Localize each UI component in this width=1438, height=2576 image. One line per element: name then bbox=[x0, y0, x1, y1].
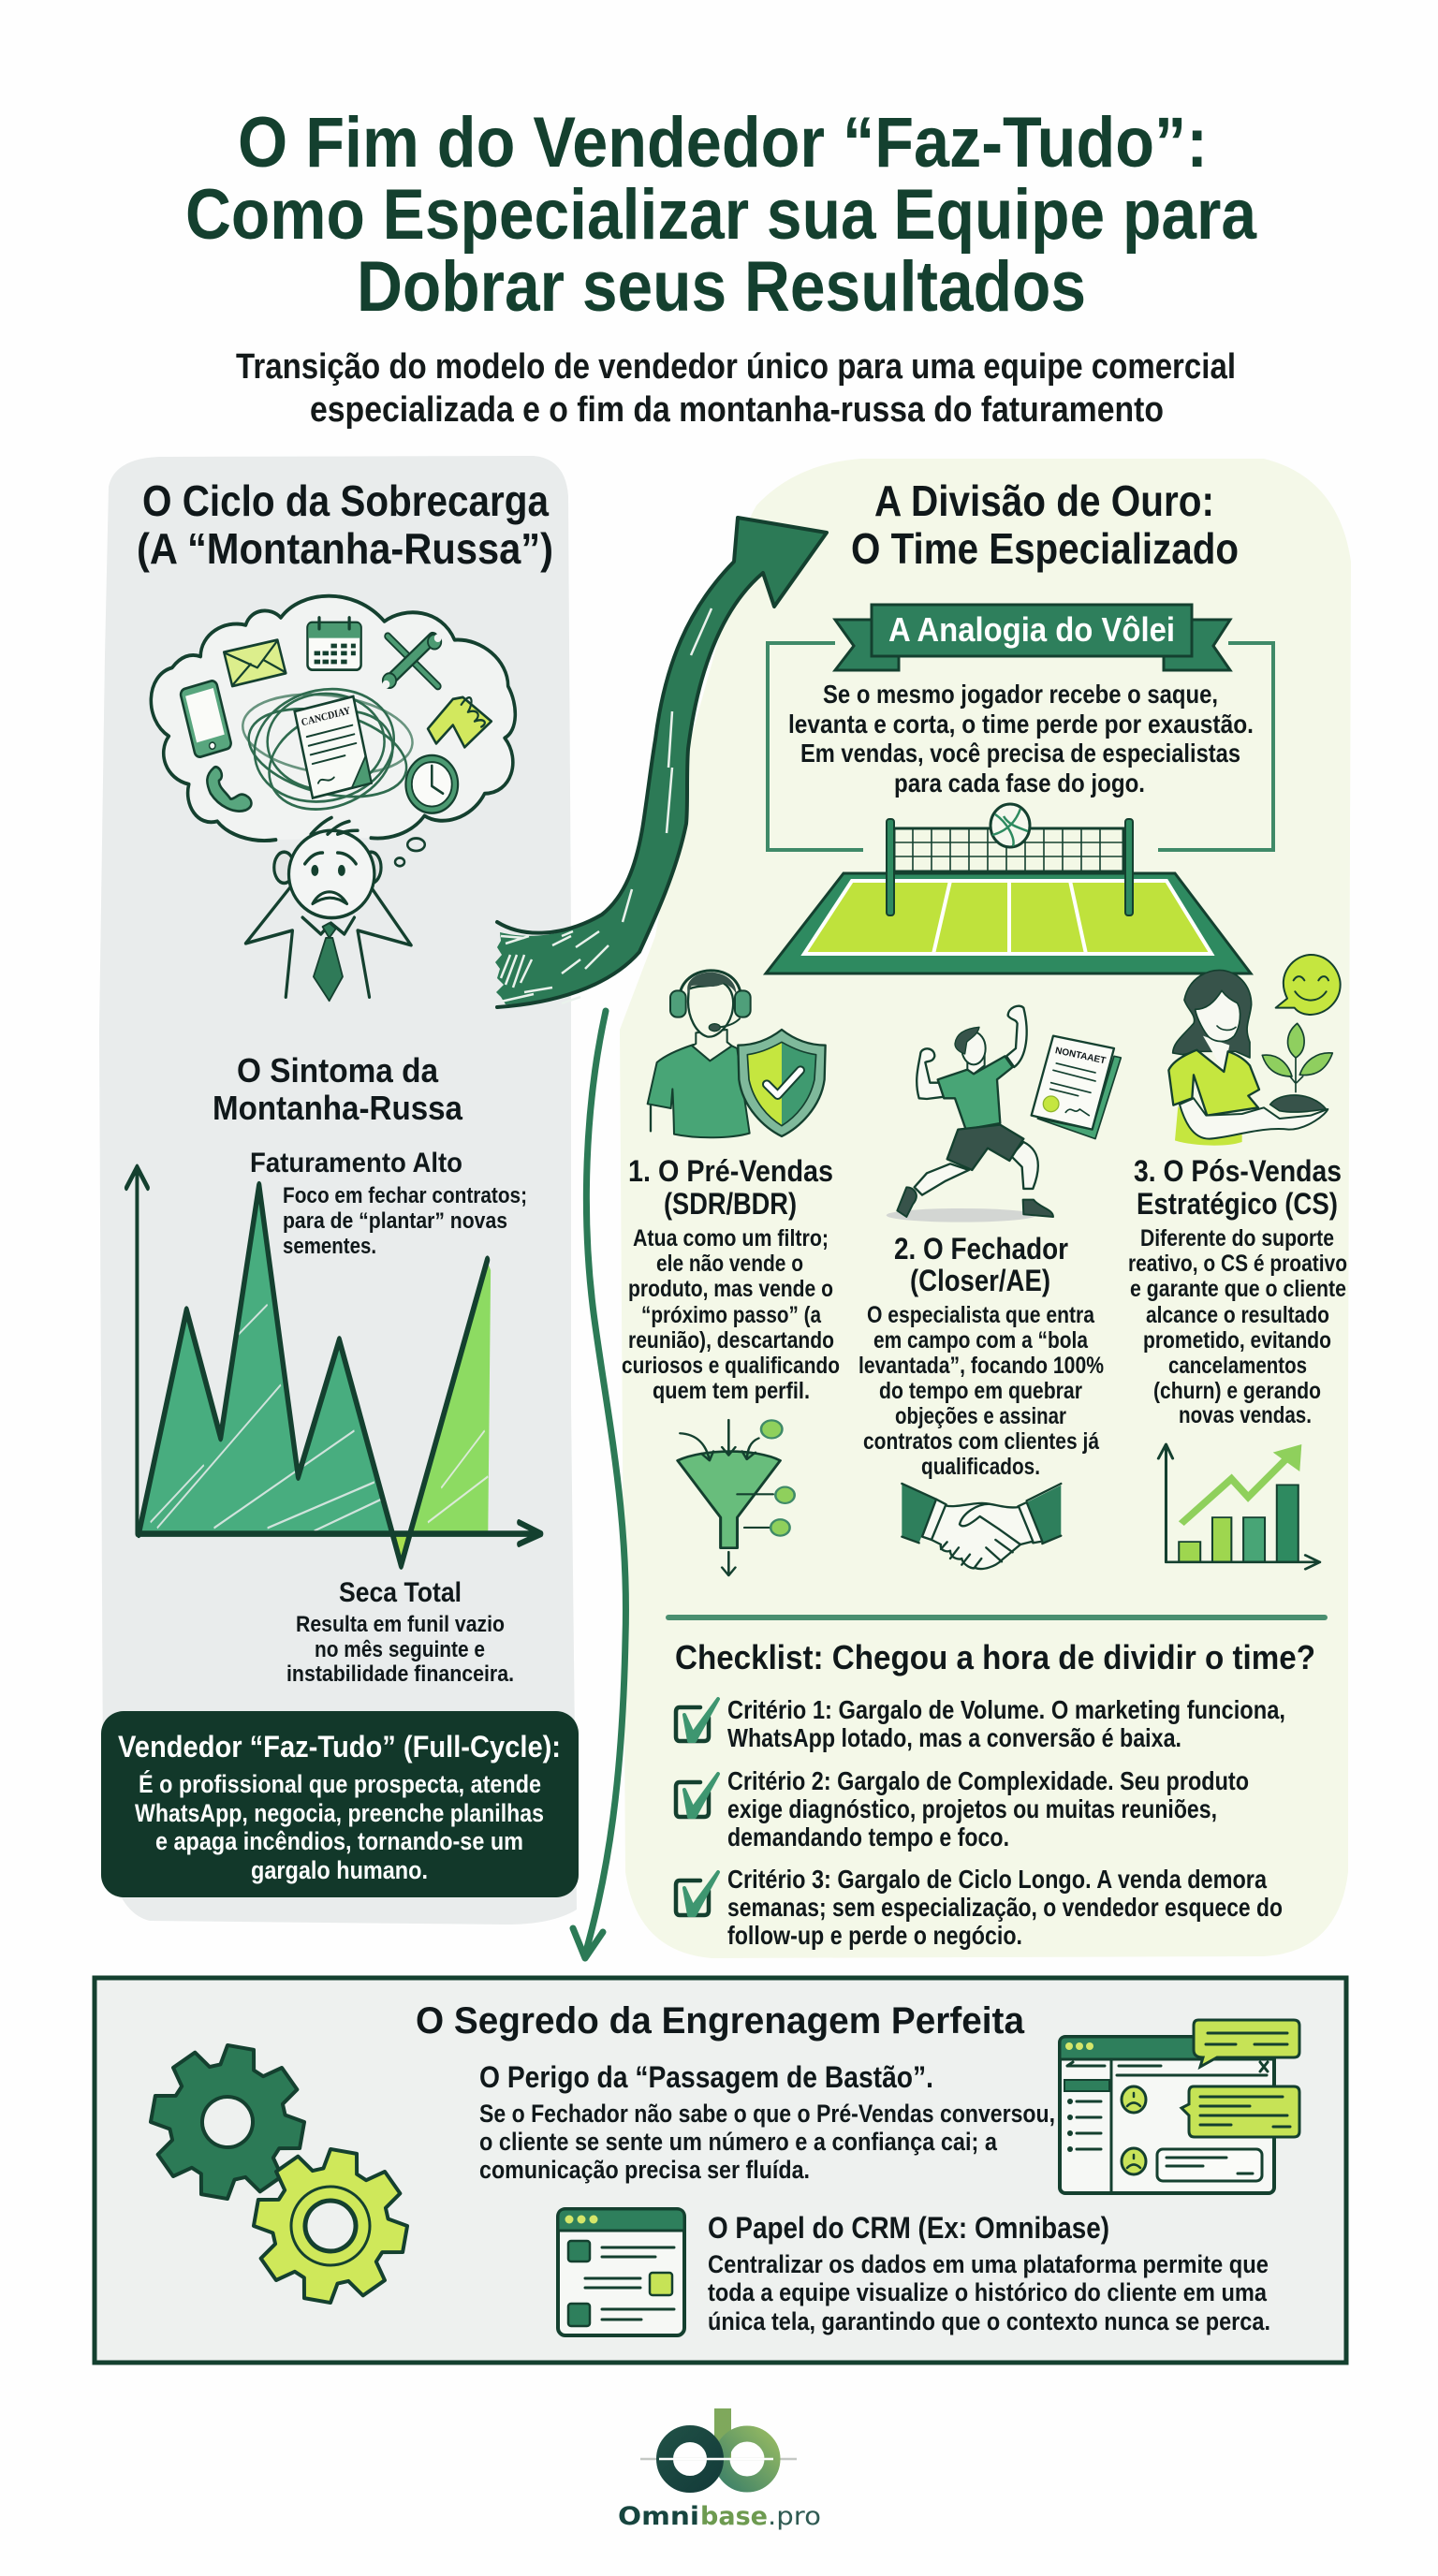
criterion 3: semanas; sem especialização, o vendedor esquece do bbox=[727, 1893, 1283, 1922]
icon: contract bbox=[295, 696, 372, 798]
role 2: fechador: contratos com clientes já bbox=[863, 1428, 1099, 1455]
criterion 2: Critério 2: Gargalo de Complexidade. Seu produto bbox=[727, 1766, 1249, 1795]
revenue line bbox=[139, 1185, 488, 1565]
label: seca total: no mês seguinte e bbox=[315, 1637, 485, 1662]
icon: contract: CANCDIAY bbox=[301, 706, 352, 728]
role 2: fechador bbox=[858, 1232, 1104, 1480]
role 2: fechador: 2. O Fechador bbox=[894, 1232, 1068, 1266]
heading: o sintoma da montanha-russa bbox=[213, 1051, 463, 1127]
stressed man bbox=[245, 817, 411, 1001]
heading: o sintoma da montanha-russa: Montanha-Russa bbox=[213, 1089, 463, 1127]
role 3: pós-vendas: Diferente do suporte bbox=[1140, 1225, 1334, 1251]
role 1: pré-vendas: “próximo passo” (a bbox=[641, 1302, 822, 1328]
eyes bbox=[311, 865, 345, 876]
role 3: pós-vendas: 3. O Pós-Vendas bbox=[1134, 1154, 1342, 1188]
text: o perigo da passagem de bastão: Se o Fechador não sabe o que o Pré-Vendas conversou, bbox=[479, 2100, 1055, 2128]
text: analogia: levanta e corta, o time perde por exaustão. bbox=[788, 710, 1254, 739]
role 1: pré-vendas: (SDR/BDR) bbox=[664, 1187, 797, 1221]
frame: analogia bbox=[768, 643, 1273, 850]
text: o perigo da passagem de bastão: comunicação precisa ser fluída. bbox=[479, 2156, 810, 2184]
text: analogia: Se o mesmo jogador recebe o saque, bbox=[823, 680, 1218, 709]
banner: a analogia do vôlei bbox=[835, 605, 1230, 670]
criterion 3: Critério 3: Gargalo de Ciclo Longo. A venda demora bbox=[727, 1865, 1267, 1894]
role 1: pré-vendas: ele não vende o bbox=[656, 1251, 803, 1277]
criterion 3 bbox=[676, 1865, 1283, 1950]
icon: sdr headset with shield bbox=[648, 971, 826, 1137]
role 2: fechador: objeções e assinar bbox=[895, 1403, 1066, 1429]
logo wordmark: Omni bbox=[618, 2502, 699, 2531]
icon: wrench and screwdriver bbox=[382, 634, 442, 688]
chat bubble middle bbox=[1181, 2086, 1299, 2137]
title: Dobrar seus Resultados bbox=[357, 247, 1086, 327]
role 3: pós-vendas: novas vendas. bbox=[1179, 1402, 1312, 1428]
icon: overwhelmed salesman with thought cloud bbox=[151, 596, 515, 1001]
light green area bbox=[409, 1262, 491, 1534]
criterion 2: exige diagnóstico, projetos ou muitas reuniões, bbox=[727, 1794, 1217, 1823]
role 3: pós-vendas: reativo, o CS é proativo bbox=[1128, 1251, 1347, 1277]
checklist bbox=[675, 1638, 1315, 1950]
icon: calendar bbox=[307, 618, 361, 670]
role 3: pós-vendas: cancelamentos bbox=[1168, 1353, 1307, 1379]
chat bubble bottom bbox=[1157, 2149, 1262, 2181]
heading: o ciclo da sobrecarga: (A “Montanha-Russa”) bbox=[137, 524, 553, 573]
callout: vendedor faz-tudo: WhatsApp, negocia, preenche planilhas bbox=[135, 1799, 544, 1827]
role 3: pós-vendas: prometido, evitando bbox=[1143, 1327, 1331, 1354]
heading: o ciclo da sobrecarga: O Ciclo da Sobrecarga bbox=[142, 476, 549, 525]
callout: vendedor faz-tudo bbox=[101, 1711, 579, 1897]
role 1: pré-vendas bbox=[622, 1154, 840, 1404]
icon: closer athlete bbox=[887, 1006, 1053, 1222]
axes bbox=[126, 1167, 541, 1544]
role 1: pré-vendas: produto, mas vende o bbox=[628, 1276, 833, 1302]
icon: envelope bbox=[224, 640, 286, 686]
role 1: pré-vendas: Atua como um filtro; bbox=[633, 1225, 829, 1251]
icon: chat window bbox=[1060, 2020, 1299, 2193]
icon: signed contract bbox=[1032, 1036, 1121, 1139]
role 1: pré-vendas: quem tem perfil. bbox=[653, 1378, 810, 1404]
checklist heading: Checklist: Chegou a hora de dividir o time? bbox=[675, 1638, 1315, 1676]
role 3: pós-vendas bbox=[1128, 1154, 1347, 1428]
title: Como Especializar sua Equipe para bbox=[185, 175, 1257, 255]
icon: funnel bbox=[678, 1420, 795, 1575]
role 1: pré-vendas: reunião), descartando bbox=[628, 1327, 834, 1354]
label: faturamento alto: Faturamento Alto bbox=[250, 1148, 462, 1178]
role 3: pós-vendas: (churn) e gerando bbox=[1153, 1378, 1321, 1404]
criterion 1: WhatsApp lotado, mas a conversão é baixa. bbox=[727, 1723, 1181, 1752]
thought bubbles bbox=[395, 839, 425, 866]
panel: ciclo da sobrecarga bbox=[99, 456, 579, 1925]
role 2: fechador: levantada”, focando 100% bbox=[858, 1353, 1104, 1379]
callout: vendedor faz-tudo: e apaga incêndios, tornando-se um bbox=[155, 1827, 523, 1855]
role 3: pós-vendas: Estratégico (CS) bbox=[1137, 1187, 1338, 1221]
callout: vendedor faz-tudo: Vendedor “Faz-Tudo” (Full-Cycle): bbox=[118, 1730, 561, 1764]
role 3: pós-vendas: alcance o resultado bbox=[1146, 1302, 1329, 1328]
role 2: fechador: em campo com a “bola bbox=[873, 1327, 1089, 1354]
criterion 3: follow-up e perde o negócio. bbox=[727, 1921, 1022, 1950]
criterion 2: demandando tempo e foco. bbox=[727, 1822, 1009, 1852]
label: seca total: Seca Total bbox=[339, 1577, 462, 1608]
role 1: pré-vendas: 1. O Pré-Vendas bbox=[628, 1154, 833, 1188]
heading: o ciclo da sobrecarga bbox=[137, 476, 553, 573]
dark green area bbox=[139, 1185, 393, 1534]
icon: smile bubble bbox=[1276, 955, 1341, 1015]
callout: vendedor faz-tudo: gargalo humano. bbox=[251, 1856, 428, 1884]
heading: a divisão de ouro: A Divisão de Ouro: bbox=[874, 476, 1214, 525]
icon: volleyball court bbox=[766, 804, 1251, 973]
icon: lime document bbox=[428, 697, 492, 747]
logo mark bbox=[640, 2408, 797, 2484]
lime dip bbox=[391, 1534, 409, 1562]
logo wordmark: .pro bbox=[768, 2502, 821, 2531]
role 3: pós-vendas: e garante que o cliente bbox=[1130, 1276, 1346, 1302]
text: analogia bbox=[788, 680, 1254, 798]
role 1: pré-vendas: curiosos e qualificando bbox=[622, 1353, 840, 1379]
hatching bbox=[151, 1305, 488, 1531]
arrow: thin curved arrow down bbox=[573, 1011, 625, 1958]
label: faturamento alto bbox=[250, 1148, 527, 1259]
label: seca total bbox=[286, 1577, 514, 1687]
text: analogia: para cada fase do jogo. bbox=[894, 768, 1145, 798]
icon: handset bbox=[207, 767, 251, 812]
logo wordmark: base bbox=[700, 2502, 768, 2531]
banner: a analogia do vôlei: A Analogia do Vôlei bbox=[888, 610, 1175, 649]
icon: handshake bbox=[902, 1484, 1061, 1569]
subtitle bbox=[236, 347, 1236, 430]
text: o perigo da passagem de bastão: o cliente se sente um número e a confiança cai; a bbox=[479, 2128, 998, 2156]
thought cloud bbox=[151, 596, 515, 841]
panel: a divisão de ouro bbox=[620, 459, 1351, 1958]
heading: o sintoma da montanha-russa: O Sintoma da bbox=[237, 1051, 439, 1090]
title: O Fim do Vendedor “Faz-Tudo”: bbox=[238, 103, 1208, 183]
label: seca total: instabilidade financeira. bbox=[286, 1661, 514, 1687]
icon: crm window bbox=[558, 2209, 684, 2335]
label: faturamento alto: sementes. bbox=[283, 1234, 376, 1259]
criterion 2 bbox=[676, 1766, 1249, 1852]
text: o perigo da passagem de bastão bbox=[479, 2060, 1055, 2184]
role 2: fechador: O especialista que entra bbox=[867, 1302, 1095, 1328]
logo wordmark bbox=[618, 2502, 821, 2531]
avatars bbox=[1122, 2086, 1146, 2174]
text: o papel do crm: toda a equipe visualize o histórico do cliente em uma bbox=[708, 2278, 1268, 2306]
subtitle: Transição do modelo de vendedor único para uma equipe comercial bbox=[236, 347, 1236, 387]
heading: a divisão de ouro bbox=[851, 476, 1239, 573]
callout: vendedor faz-tudo: É o profissional que prospecta, atende bbox=[139, 1769, 541, 1798]
text: o papel do crm bbox=[708, 2211, 1270, 2335]
role 2: fechador: do tempo em quebrar bbox=[879, 1378, 1082, 1404]
title bbox=[185, 103, 1257, 327]
icon: customer success woman bbox=[1168, 970, 1332, 1146]
criterion 1: Critério 1: Gargalo de Volume. O marketing funciona, bbox=[727, 1695, 1285, 1724]
criterion 1 bbox=[676, 1695, 1285, 1752]
chart: roller coaster revenue bbox=[126, 1167, 541, 1565]
logo: omnibase.pro bbox=[618, 2408, 821, 2531]
text: o perigo da passagem de bastão: O Perigo da “Passagem de Bastão”. bbox=[479, 2060, 933, 2094]
arrow: big curved arrow up bbox=[495, 518, 827, 1007]
label: faturamento alto: para de “plantar” novas bbox=[283, 1208, 507, 1234]
icon: growth chart bbox=[1158, 1444, 1320, 1569]
icon: phone bbox=[180, 680, 232, 758]
subtitle: especializada e o fim da montanha-russa do faturamento bbox=[310, 390, 1164, 430]
panel: o segredo da engrenagem perfeita bbox=[95, 1978, 1346, 2363]
text: o papel do crm: O Papel do CRM (Ex: Omnibase) bbox=[708, 2211, 1109, 2245]
icons: funnel and growth chart bbox=[678, 1420, 1320, 1575]
heading: a divisão de ouro: O Time Especializado bbox=[851, 524, 1239, 573]
text: o papel do crm: única tela, garantindo que o contexto nunca se perca. bbox=[708, 2307, 1270, 2335]
court bbox=[766, 873, 1251, 973]
ball bbox=[990, 804, 1030, 847]
label: faturamento alto: Foco em fechar contratos; bbox=[283, 1183, 527, 1208]
heading: segredo: O Segredo da Engrenagem Perfeita bbox=[416, 2000, 1025, 2042]
icon: dark gear bbox=[139, 2034, 315, 2210]
label: seca total: Resulta em funil vazio bbox=[296, 1612, 505, 1637]
text: o papel do crm: Centralizar os dados em uma plataforma permite que bbox=[708, 2250, 1269, 2278]
chat bubble top bbox=[1194, 2020, 1299, 2067]
icon: signed contract: NONTAAET bbox=[1054, 1046, 1107, 1066]
scribble tangle bbox=[239, 677, 416, 826]
icon: lime gear bbox=[242, 2138, 418, 2314]
net bbox=[887, 819, 1133, 915]
role 2: fechador: (Closer/AE) bbox=[910, 1264, 1050, 1297]
text: analogia: Em vendas, você precisa de especialistas bbox=[800, 739, 1240, 768]
role 2: fechador: qualificados. bbox=[921, 1454, 1040, 1480]
icon: clock bbox=[405, 755, 458, 813]
